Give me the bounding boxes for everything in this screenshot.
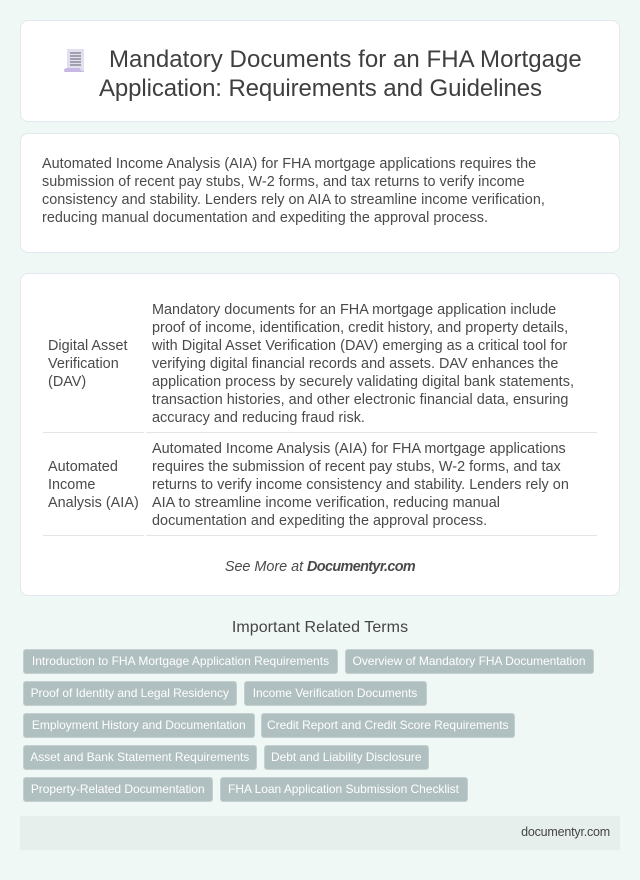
panel: summary text: reducing manual documentation and expediting the approval process.	[42, 210, 488, 226]
tag: Employment History and Documentation	[32, 718, 246, 732]
footer text: documentyr.com	[521, 825, 610, 839]
panel: summary text: Automated Income Analysis (AIA) for FHA mortgage applications requires the	[42, 156, 536, 172]
term: Digital Asset Verification: Verification	[48, 356, 119, 372]
tag: Overview of Mandatory FHA Documentation	[353, 654, 585, 668]
see more link: See More at Documentyr.com	[225, 559, 415, 575]
tag: Asset and Bank Statement Requirements	[30, 750, 249, 764]
title: Application: Requirements and Guidelines	[99, 74, 542, 102]
definition: Digital Asset Verification	[152, 302, 574, 426]
definition: Automated Income Analysis	[152, 441, 569, 529]
tag: Introduction to FHA Mortgage Application Requirements	[32, 654, 329, 668]
tag	[344, 649, 594, 674]
definition: Digital Asset Verification: Mandatory documents for an FHA mortgage application include	[152, 302, 556, 318]
term: Automated Income Analysis	[48, 459, 139, 511]
definition: Automated Income Analysis: returns to verify income consistency and stability. Lenders rely on	[152, 477, 569, 493]
title: Mandatory Documents for an FHA Mortgage	[109, 46, 582, 72]
panel: title card	[20, 20, 620, 122]
tag	[261, 713, 514, 738]
panel: terms table	[20, 273, 620, 596]
tag	[23, 681, 236, 706]
tag: Income Verification Documents	[253, 686, 417, 700]
definition: Digital Asset Verification: application process by securely validating digital bank statements,	[152, 374, 574, 390]
definition: Automated Income Analysis: documentation and expediting the approval process.	[152, 513, 487, 529]
tag: Debt and Liability Disclosure	[271, 750, 422, 764]
tag	[23, 713, 254, 738]
footer bar	[20, 816, 620, 850]
tag	[23, 649, 338, 674]
definition: Automated Income Analysis: requires the submission of recent pay stubs, W-2 forms, and tax	[152, 459, 561, 475]
definition: Digital Asset Verification: verifying digital financial records and assets. DAV enhances the	[152, 356, 558, 372]
term: Automated Income Analysis: Automated	[48, 459, 118, 475]
tag	[220, 777, 468, 802]
term: Automated Income Analysis: Income	[48, 477, 95, 493]
definition: Digital Asset Verification: with Digital Asset Verification (DAV) emerging as a critical tool for	[152, 338, 567, 354]
tag: Proof of Identity and Legal Residency	[31, 686, 229, 700]
term: Digital Asset Verification	[48, 338, 128, 390]
definition: Automated Income Analysis: AIA to streamline income verification, reducing manual	[152, 495, 500, 511]
definition: Digital Asset Verification: transaction histories, and other electronic financial data, ensuring	[152, 392, 568, 408]
tag: Property-Related Documentation	[31, 782, 205, 796]
icon: document scroll	[64, 49, 84, 72]
heading: related terms: Important Related Terms	[232, 619, 408, 636]
definition: Digital Asset Verification: accuracy and reducing fraud risk.	[152, 410, 365, 426]
panel: summary text	[20, 133, 620, 253]
panel: summary text: consistency and stability. Lenders rely on AIA to streamline income verification,	[42, 192, 545, 208]
tag	[244, 681, 426, 706]
tag group: related terms	[23, 649, 594, 802]
tag: FHA Loan Application Submission Checklist	[228, 782, 459, 796]
tag	[264, 745, 429, 770]
tag: Credit Report and Credit Score Requirements	[267, 718, 508, 732]
term: Automated Income Analysis: Analysis (AIA)	[48, 495, 139, 511]
title	[99, 46, 582, 102]
term: Digital Asset Verification: Digital Asset	[48, 338, 128, 354]
definition: Automated Income Analysis: Automated Income Analysis (AIA) for FHA mortgage applications	[152, 441, 566, 457]
tag	[23, 745, 256, 770]
definition: Digital Asset Verification: proof of income, identification, credit history, and property details,	[152, 320, 568, 336]
term: Digital Asset Verification: (DAV)	[48, 374, 86, 390]
tag	[23, 777, 212, 802]
panel: summary text: submission of recent pay stubs, W-2 forms, and tax returns to verify income	[42, 174, 525, 190]
